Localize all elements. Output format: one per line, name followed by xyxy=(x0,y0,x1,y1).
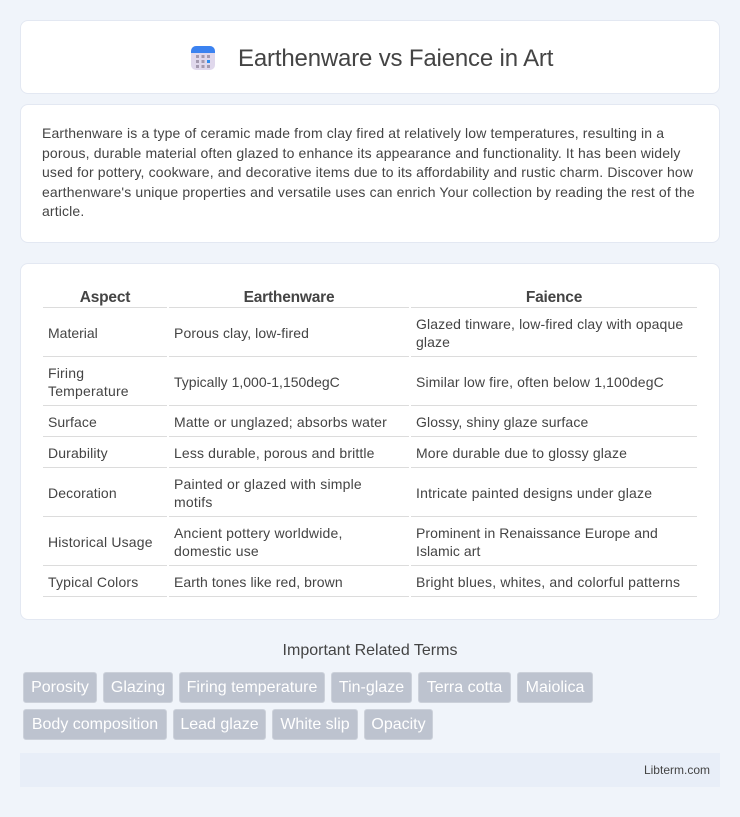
comparison table: domestic use xyxy=(174,543,259,559)
tag: Tin-glaze xyxy=(339,679,404,696)
tag xyxy=(173,709,266,740)
tag xyxy=(23,709,167,740)
tag: White slip xyxy=(280,716,350,733)
tag: Maiolica xyxy=(526,679,584,696)
comparison table: Ancient pottery worldwide, xyxy=(174,525,343,541)
text block: introduction: article. xyxy=(42,203,84,219)
comparison table: Glazed tinware, low-fired clay with opaque xyxy=(416,316,683,332)
comparison table: Less durable, porous and brittle xyxy=(174,445,375,461)
table header: Faience: Faience xyxy=(526,289,582,306)
comparison table: Islamic art xyxy=(416,543,480,559)
comparison table: Earth tones like red, brown xyxy=(174,574,343,590)
table header: Aspect: Aspect xyxy=(80,289,130,306)
tag xyxy=(517,672,593,703)
tag xyxy=(23,672,97,703)
comparison table: Porous clay, low-fired xyxy=(174,325,309,341)
comparison table: Similar low fire, often below 1,100degC xyxy=(416,374,664,390)
text block: introduction: earthenware's unique properties and versatile uses can enrich Your collection by reading the rest of the xyxy=(42,184,695,200)
tag: Body composition xyxy=(32,716,158,733)
panel: title card xyxy=(20,20,720,94)
panel: introduction xyxy=(20,104,720,243)
tag: Terra cotta xyxy=(427,679,502,696)
comparison table: Matte or unglazed; absorbs water xyxy=(174,414,387,430)
footer bar xyxy=(20,753,720,787)
comparison table: Glossy, shiny glaze surface xyxy=(416,414,588,430)
row: Durability: Durability xyxy=(48,445,108,461)
row: Surface: Surface xyxy=(48,414,97,430)
tag xyxy=(179,672,325,703)
tag: Porosity xyxy=(31,679,89,696)
tag: Lead glaze xyxy=(180,716,259,733)
icon: calendar xyxy=(191,46,215,70)
panel: comparison table xyxy=(20,263,720,620)
text block: introduction xyxy=(42,125,695,219)
text block: introduction: Earthenware is a type of ceramic made from clay fired at relatively low temperatures, resulting in a xyxy=(42,125,664,141)
tag: Firing temperature xyxy=(187,679,317,696)
row: Historical Usage: Historical Usage xyxy=(48,534,153,550)
tag xyxy=(418,672,511,703)
row: Firing Temperature xyxy=(48,365,129,399)
comparison table: Typically 1,000-1,150degC xyxy=(174,374,340,390)
row: Firing Temperature: Temperature xyxy=(48,383,129,399)
table header: Earthenware: Earthenware xyxy=(244,289,334,306)
title: Earthenware vs Faience in Art xyxy=(238,45,553,72)
footer credit: Libterm.com xyxy=(644,763,710,777)
heading: related terms: Important Related Terms xyxy=(283,642,457,659)
tag: Opacity xyxy=(371,716,426,733)
tag xyxy=(103,672,173,703)
comparison table: Painted or glazed with simple xyxy=(174,476,362,492)
comparison table: Prominent in Renaissance Europe and xyxy=(416,525,658,541)
comparison table: motifs xyxy=(174,494,213,510)
row: Material: Material xyxy=(48,325,98,341)
tag xyxy=(364,709,433,740)
tags: related terms xyxy=(23,672,593,740)
comparison table: More durable due to glossy glaze xyxy=(416,445,627,461)
text block: introduction: used for pottery, cookware, and decorative items due to its affordability and rustic charm. Discover how xyxy=(42,164,693,180)
comparison table: glaze xyxy=(416,334,450,350)
tag xyxy=(272,709,358,740)
tag: Glazing xyxy=(111,679,165,696)
row: Typical Colors: Typical Colors xyxy=(48,574,138,590)
comparison table: Bright blues, whites, and colorful patterns xyxy=(416,574,680,590)
row: Firing Temperature: Firing xyxy=(48,365,84,381)
row: Decoration: Decoration xyxy=(48,485,117,501)
comparison table: Intricate painted designs under glaze xyxy=(416,485,652,501)
tag xyxy=(331,672,412,703)
text block: introduction: porous, durable material often glazed to enhance its appearance and functionality. It has been widely xyxy=(42,145,681,161)
